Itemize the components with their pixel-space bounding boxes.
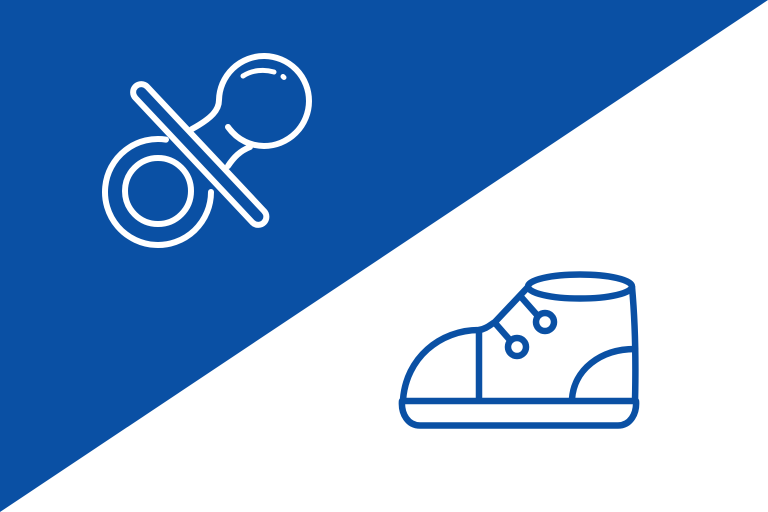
pacifier outer ring: [105, 139, 211, 245]
shoe heel seam: [572, 349, 635, 399]
pacifier highlight dot: [283, 76, 284, 78]
pacifier inner ring: [125, 158, 191, 224]
pacifier highlight: [243, 70, 274, 76]
icon: baby shoe: [402, 274, 636, 426]
shoe collar: [528, 274, 632, 298]
lower lace: [495, 323, 509, 339]
upper lace eyelet: [536, 313, 554, 331]
shoe toe and upper: [403, 287, 528, 400]
shoe sole: [402, 401, 636, 426]
lower lace eyelet: [508, 338, 526, 356]
shoe toe seam: [476, 330, 482, 400]
shoe back edge: [632, 287, 635, 401]
upper lace: [522, 298, 537, 315]
pacifier handle bar: [133, 84, 266, 225]
icon: pacifier: [105, 56, 309, 245]
pacifier bulb and neck: [192, 56, 309, 146]
pacifier lower neck: [228, 147, 250, 166]
